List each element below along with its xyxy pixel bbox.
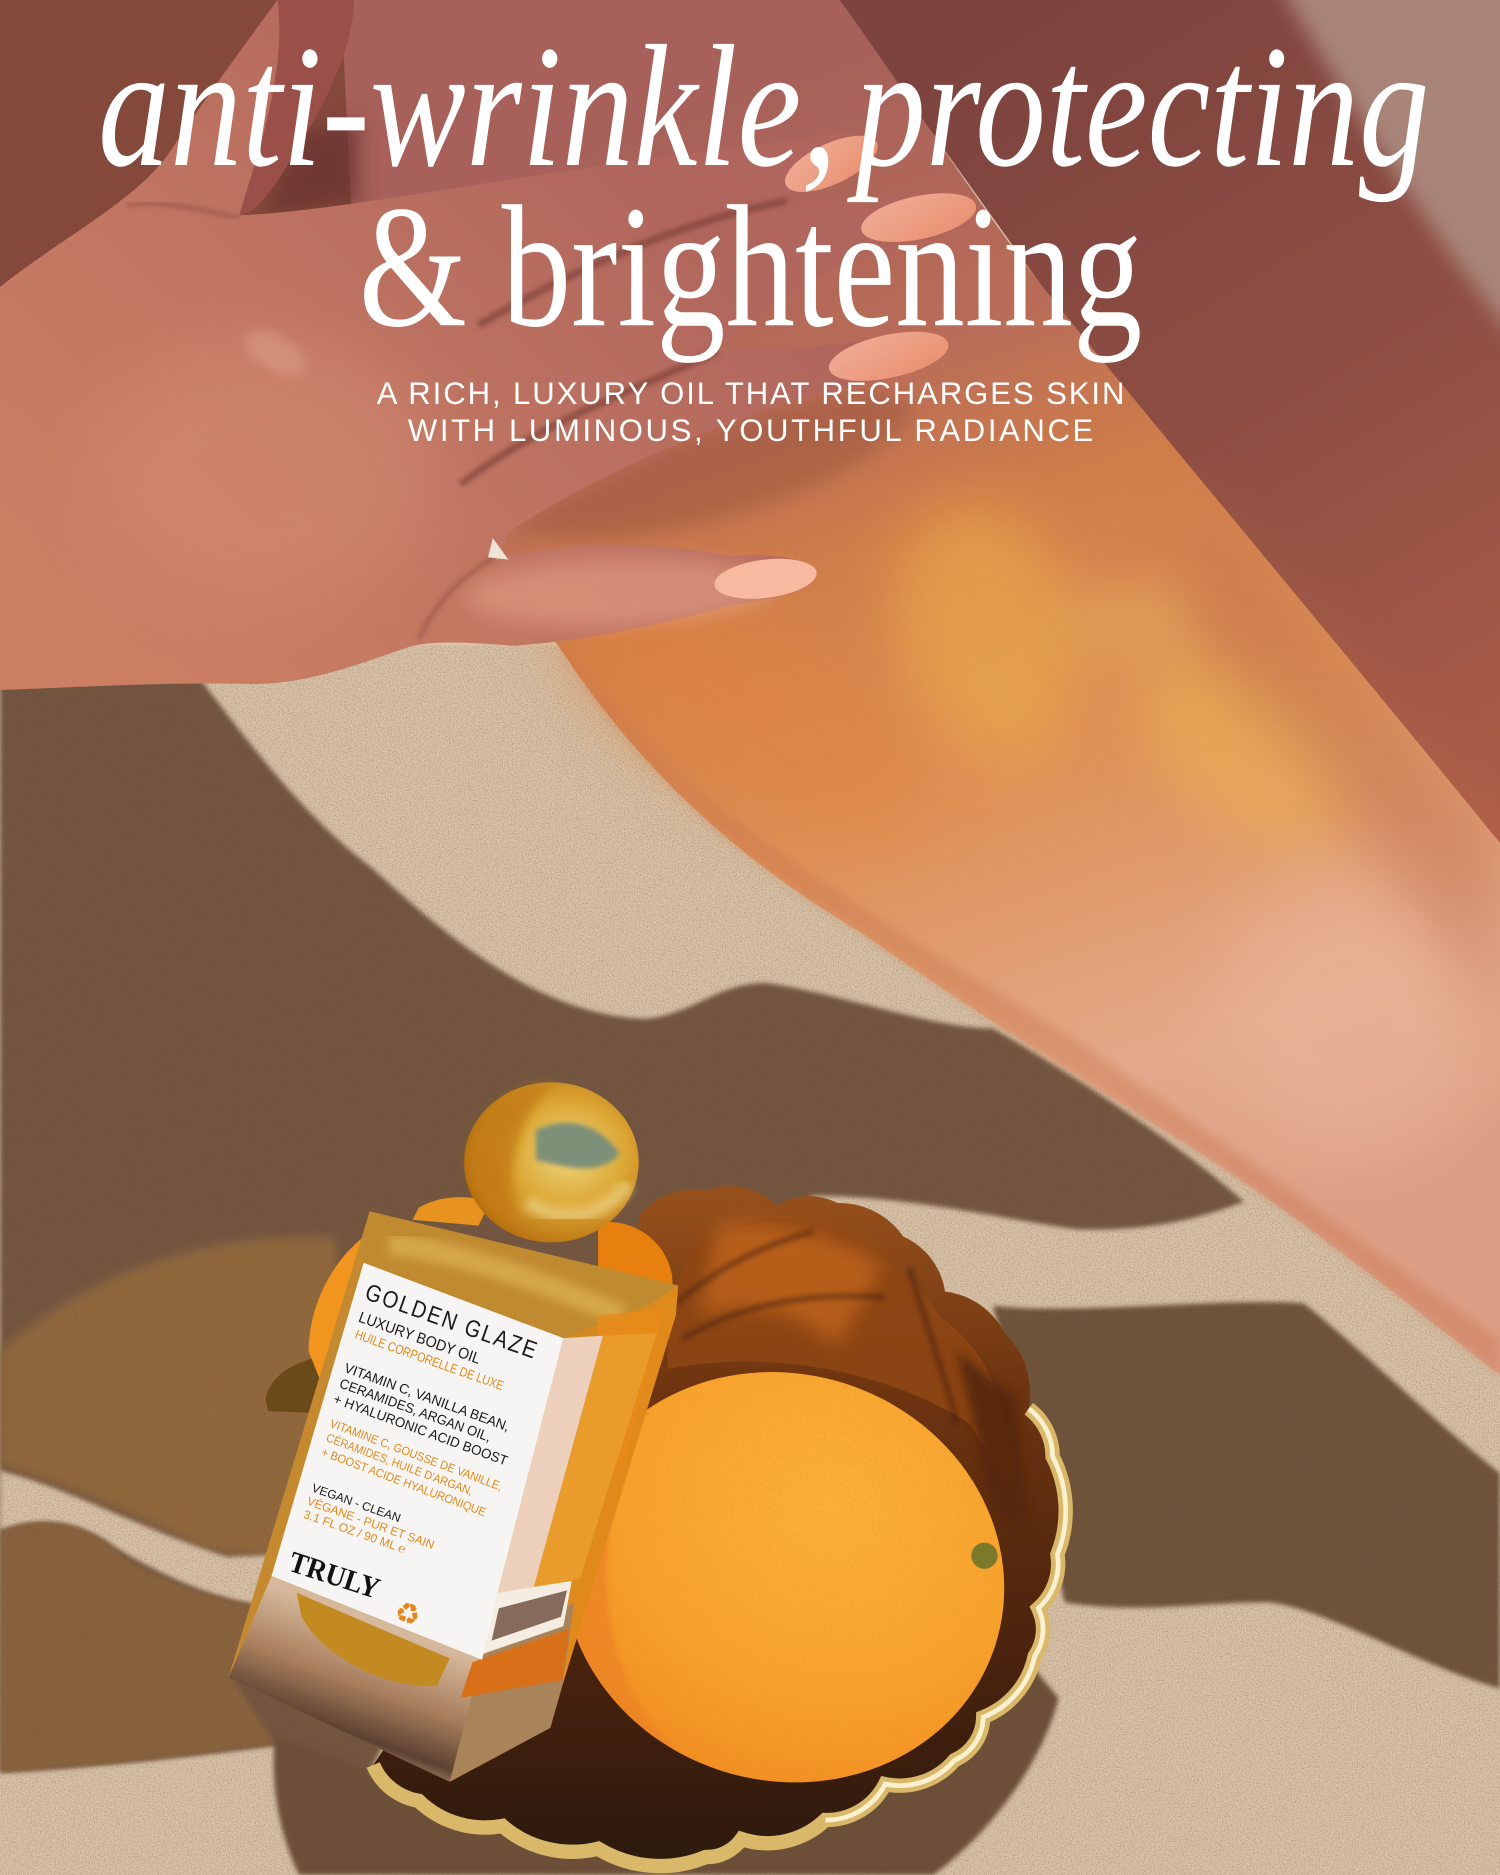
- label text: LUXURY BODY OIL: [356, 1309, 483, 1368]
- panel: scalloped gold dish: [266, 1186, 1066, 1866]
- label text: HUILE CORPORELLE DE LUXE: [353, 1327, 506, 1393]
- barcode: [480, 1581, 572, 1655]
- bottle cap: [464, 1082, 639, 1242]
- subtitle: [377, 376, 1124, 448]
- label white face: [272, 1263, 563, 1660]
- finger gaps: [478, 201, 787, 325]
- label text: CÉRAMIDES, HUILE D'ARGAN,: [324, 1430, 475, 1498]
- label text: VITAMINE C, GOUSSE DE VANILLE,: [328, 1416, 504, 1493]
- label text: VITAMIN C, VANILLA BEAN,: [342, 1360, 512, 1434]
- subtitle: A RICH, LUXURY OIL THAT RECHARGES SKIN: [377, 376, 1124, 411]
- orange stem: [971, 1543, 998, 1569]
- icon: golden glaze oil bottle: [228, 1082, 678, 1782]
- label text: [285, 1279, 542, 1634]
- ingredients strip: [498, 1336, 603, 1593]
- icon: orange fruit: [576, 1372, 1004, 1782]
- label text: VEGAN - CLEAN: [310, 1481, 403, 1525]
- copper shell lobes: [667, 1217, 1014, 1495]
- title: & brightening: [359, 169, 1142, 363]
- label text: + HYALURONIC ACID BOOST: [332, 1391, 510, 1469]
- glass base: [228, 1576, 482, 1782]
- label text: ♻: [390, 1593, 425, 1634]
- bottle glass: [228, 1211, 678, 1782]
- title: anti-wrinkle,: [98, 9, 837, 203]
- icon: orange slice behind bottle: [309, 1197, 673, 1387]
- label text: VÉGANE - PUR ET SAIN: [305, 1493, 437, 1552]
- nails: [777, 124, 885, 203]
- photo: legs and skin background: [0, 0, 1500, 1375]
- front leg: [341, 0, 1500, 1375]
- label text: + BOOST ACIDE HYALURONIQUE: [320, 1445, 488, 1519]
- title: [98, 9, 1429, 363]
- label text: CERAMIDES, ARGAN OIL,: [337, 1376, 493, 1445]
- dish rim: [373, 1409, 1066, 1866]
- label text: 3.1 FL OZ / 90 ML ℮: [302, 1507, 408, 1556]
- upper finger side: [239, 0, 354, 215]
- orange side panel: [533, 1333, 657, 1588]
- hand shadow on leg: [508, 395, 911, 538]
- subtitle: WITH LUMINOUS, YOUTHFUL RADIANCE: [408, 413, 1093, 448]
- oil pool: [297, 1593, 450, 1686]
- label text: GOLDEN GLAZE: [362, 1279, 542, 1365]
- label text: TRULY: [285, 1545, 384, 1606]
- icon: hand applying oil: [0, 0, 980, 690]
